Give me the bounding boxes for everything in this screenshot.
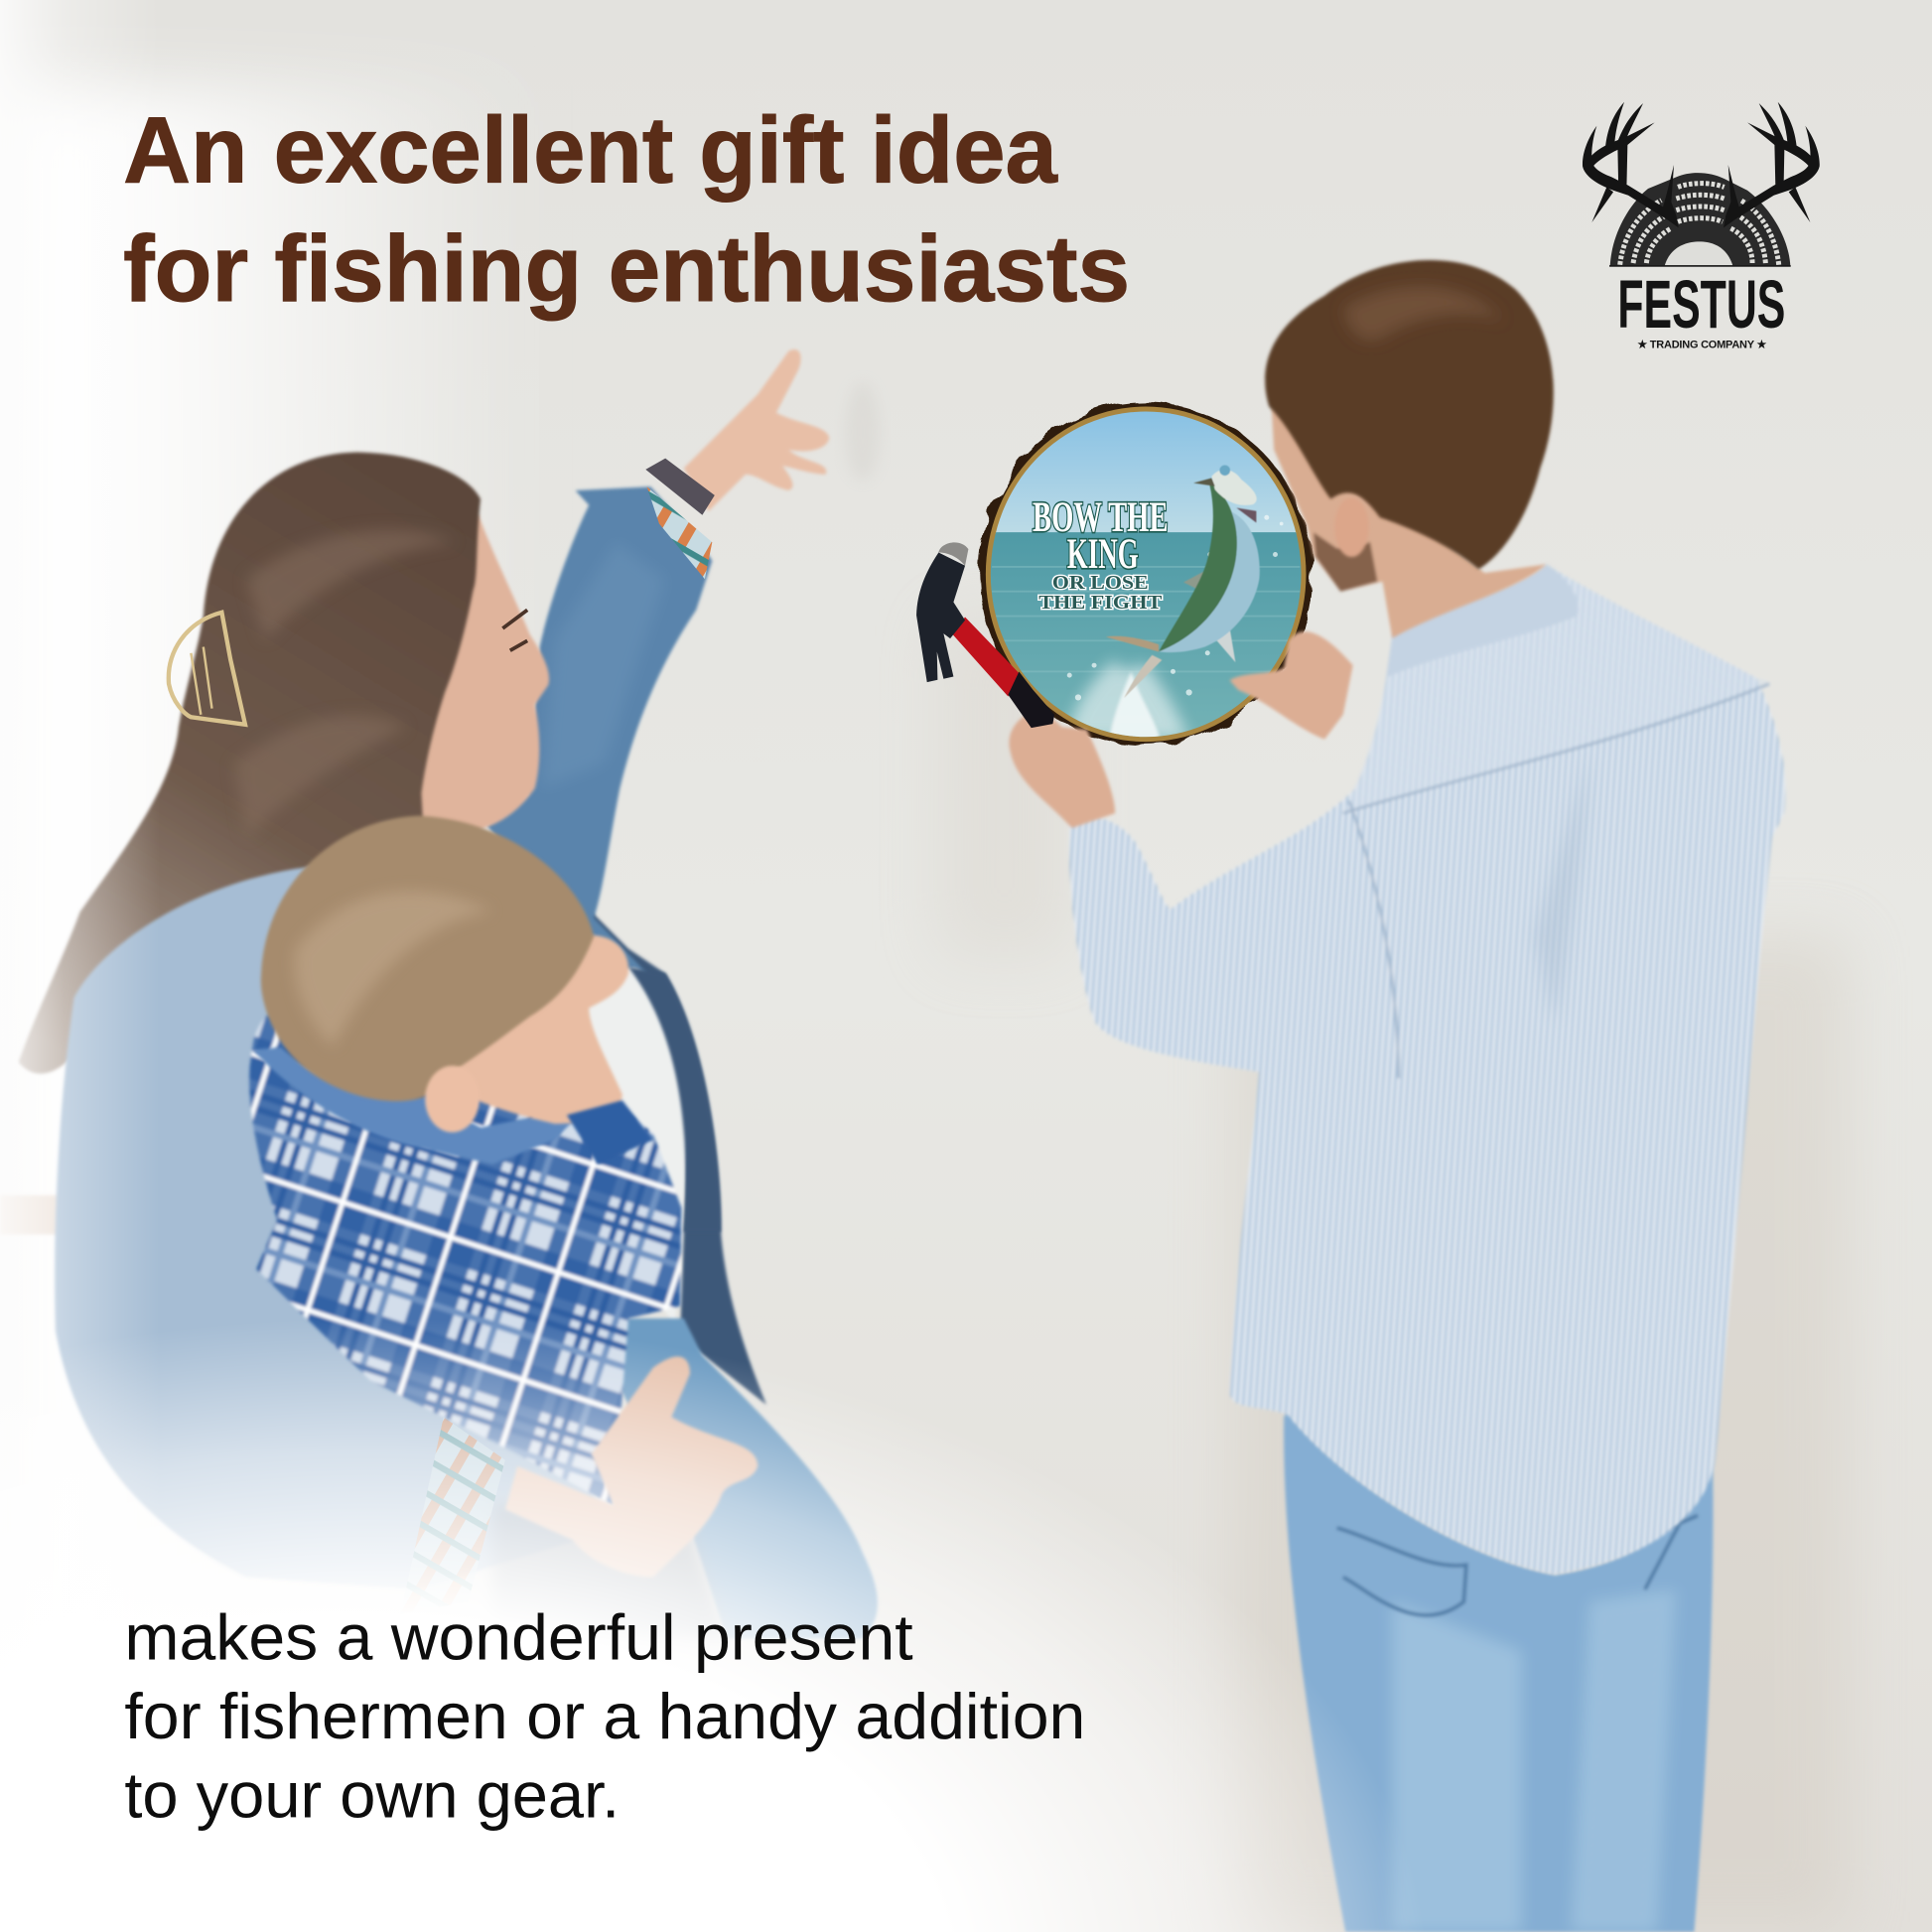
heading: An excellent gift idea	[123, 98, 1058, 203]
tree stump emblem	[1609, 173, 1791, 267]
baby sleeve cuff	[567, 1100, 653, 1165]
baby hair	[261, 816, 594, 1101]
sign text	[1033, 493, 1169, 614]
body text	[124, 1602, 1085, 1832]
mother's hand	[505, 1356, 758, 1578]
sign text: BOW THE	[1033, 493, 1169, 541]
logo wordmark: FESTUS	[1617, 266, 1785, 343]
hand holding hammer	[1009, 709, 1115, 828]
heading: for fishing enthusiasts	[123, 216, 1130, 321]
sign text: THE FIGHT	[1038, 592, 1162, 614]
eyebrow and eye	[502, 610, 527, 650]
hand on sign	[1230, 631, 1353, 740]
sleeve cuff	[647, 486, 712, 579]
jeans	[1284, 1411, 1714, 1932]
shirt collar	[252, 1047, 579, 1165]
left antler	[1583, 102, 1679, 227]
light jacket	[55, 857, 617, 1589]
logo: Festus Trading Company	[1583, 102, 1820, 351]
bark edge	[980, 403, 1312, 746]
man figure	[1069, 260, 1785, 1932]
body text: for fishermen or a handy addition	[124, 1681, 1085, 1752]
woman figure	[19, 349, 880, 1639]
baby ear	[425, 1066, 480, 1133]
sleeve shading	[542, 542, 665, 788]
water splash	[1066, 515, 1284, 740]
jacket cuff	[400, 1417, 505, 1614]
baby hair highlight	[295, 891, 492, 1047]
logo tagline: ★ TRADING COMPANY ★	[1637, 340, 1766, 351]
baby face and fist	[444, 935, 628, 1124]
right antler	[1724, 102, 1820, 227]
heading	[123, 98, 1130, 321]
face and neck	[1272, 407, 1547, 638]
wall shadow of pointing hand	[845, 382, 880, 481]
body text: makes a wonderful present	[124, 1602, 913, 1674]
long hair	[19, 452, 481, 1073]
hair highlights	[234, 530, 456, 838]
man hands and hammer	[916, 542, 1353, 828]
baby leg	[604, 1318, 878, 1639]
dark jacket edge front	[628, 967, 721, 1232]
watch	[645, 459, 715, 515]
wall sign: bark slice with tarpon	[980, 403, 1312, 746]
sign picture	[986, 407, 1309, 742]
dark area under hand	[492, 1503, 727, 1639]
neck and face	[357, 514, 549, 863]
hair	[1265, 260, 1554, 569]
body text: to your own gear.	[124, 1760, 620, 1832]
dark jacket edge	[579, 899, 766, 1405]
pointing hand	[684, 349, 829, 511]
hammer	[916, 542, 1054, 728]
baby plaid shirt	[249, 998, 681, 1506]
striped shirt	[1069, 564, 1785, 1575]
tarpon fish	[1106, 465, 1260, 698]
sign text: KING	[1067, 530, 1139, 578]
white top	[579, 968, 690, 1324]
denim sleeve	[486, 486, 712, 980]
sign text: OR LOSE	[1052, 572, 1149, 594]
hair clip	[169, 613, 245, 725]
